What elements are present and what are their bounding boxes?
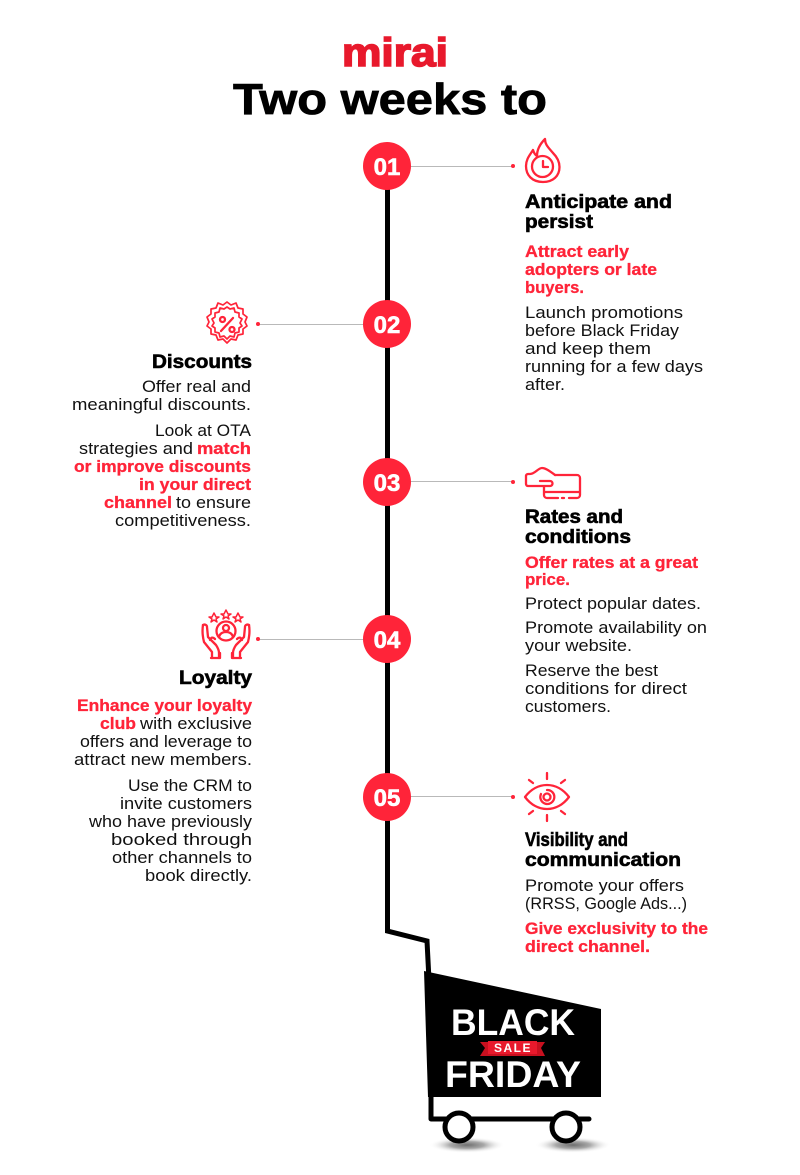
- text block: 05 Visibility and communication: Give exclusivity to the: [525, 919, 708, 938]
- step 01 marker: [363, 142, 515, 190]
- text block: 05 Visibility and communication: communication: [525, 850, 681, 871]
- text block: 04 Loyalty: Use the CRM to: [128, 776, 252, 795]
- step 03 marker: 03: [374, 470, 400, 497]
- text block: 04 Loyalty: offers and leverage to: [80, 732, 252, 751]
- text block: 01 Anticipate and persist: [525, 192, 703, 394]
- text block: 03 Rates and conditions: price.: [525, 570, 570, 589]
- text block: 03 Rates and conditions: Protect popular dates.: [525, 594, 701, 613]
- step 04 marker: [256, 615, 411, 663]
- text block: 01 Anticipate and persist: Attract early: [525, 242, 630, 261]
- step 05 marker: 05: [374, 785, 400, 812]
- text block: 03 Rates and conditions: conditions for direct: [525, 679, 687, 698]
- text block: 01 Anticipate and persist: running for a few days: [525, 357, 703, 376]
- text block: 05 Visibility and communication: Visibility and: [525, 830, 628, 851]
- text block: 03 Rates and conditions: conditions: [525, 527, 631, 548]
- text block: 02 Discounts: in your direct: [139, 475, 251, 494]
- text block: 04 Loyalty: Loyalty: [179, 668, 252, 689]
- shopping cart: Black Friday: FRIDAY: [445, 1054, 581, 1095]
- timeline spine: [388, 166, 429, 980]
- text block: 02 Discounts: meaningful discounts.: [72, 395, 251, 414]
- text block: 04 Loyalty: invite customers: [120, 794, 252, 813]
- text block: 02 Discounts: competitiveness.: [115, 511, 251, 530]
- text block: 04 Loyalty: who have previously: [88, 812, 253, 831]
- text block: 01 Anticipate and persist: Anticipate and: [525, 192, 672, 213]
- text block: 02 Discounts: strategies and: [79, 439, 193, 458]
- text block: 03 Rates and conditions: Promote availability on: [525, 618, 707, 637]
- step 01 marker: 01: [374, 154, 400, 181]
- text block: 03 Rates and conditions: Rates and: [525, 507, 623, 528]
- text block: 03 Rates and conditions: customers.: [525, 697, 611, 716]
- text block: 02 Discounts: match: [197, 439, 251, 458]
- text block: 01 Anticipate and persist: Launch promotions: [525, 303, 683, 322]
- icon: hand with credit card: [526, 468, 580, 498]
- shopping cart: Black Friday: SALE: [494, 1041, 532, 1055]
- step 04 marker: 04: [374, 627, 401, 654]
- text block: 03 Rates and conditions: [525, 507, 707, 716]
- text block: 04 Loyalty: club: [100, 714, 136, 733]
- text block: 04 Loyalty: attract new members.: [74, 750, 252, 769]
- text block: 04 Loyalty: other channels to: [112, 848, 252, 867]
- icon: flame with clock: [526, 139, 560, 182]
- step 05 marker: [363, 773, 515, 821]
- text block: 05 Visibility and communication: [525, 830, 708, 956]
- shopping cart: Black Friday: BLACK: [451, 1002, 575, 1043]
- text block: 02 Discounts: to ensure: [176, 493, 251, 512]
- text block: 04 Loyalty: Enhance your loyalty: [77, 696, 253, 715]
- logo: mirai: mirai: [342, 31, 448, 75]
- text block: 01 Anticipate and persist: after.: [525, 375, 565, 394]
- step 02 marker: 02: [374, 312, 400, 339]
- text block: 02 Discounts: [72, 352, 252, 530]
- text block: 04 Loyalty: booked through: [111, 830, 252, 849]
- text block: 03 Rates and conditions: your website.: [525, 636, 632, 655]
- text block: 01 Anticipate and persist: adopters or late: [525, 260, 657, 279]
- text block: 04 Loyalty: book directly.: [145, 866, 252, 885]
- step 02 marker: [256, 300, 411, 348]
- text block: 05 Visibility and communication: (RRSS, Google Ads...): [525, 894, 687, 913]
- shopping cart: Black Friday: [424, 971, 611, 1153]
- text block: 01 Anticipate and persist: buyers.: [525, 278, 584, 297]
- text block: 01 Anticipate and persist: before Black Friday: [525, 321, 680, 340]
- title: Two weeks to: [233, 75, 547, 124]
- text block: 02 Discounts: channel: [104, 493, 172, 512]
- text block: 02 Discounts: or improve discounts: [74, 457, 251, 476]
- text block: 04 Loyalty: [74, 668, 253, 885]
- text block: 04 Loyalty: with exclusive: [139, 714, 252, 733]
- icon: eye with rays: [525, 773, 569, 821]
- icon: discount badge: [207, 302, 247, 343]
- text block: 02 Discounts: Look at OTA: [155, 421, 252, 440]
- text block: 05 Visibility and communication: direct channel.: [525, 937, 650, 956]
- text block: 01 Anticipate and persist: persist: [525, 212, 594, 233]
- text block: 02 Discounts: Discounts: [152, 352, 252, 373]
- icon: hands holding customer and stars: [203, 610, 249, 658]
- text block: 02 Discounts: Offer real and: [142, 377, 251, 396]
- text block: 05 Visibility and communication: Promote your offers: [525, 876, 684, 895]
- text block: 03 Rates and conditions: Offer rates at a great: [525, 553, 698, 572]
- step 03 marker: [363, 458, 515, 506]
- text block: 01 Anticipate and persist: and keep them: [525, 339, 651, 358]
- text block: 03 Rates and conditions: Reserve the best: [525, 661, 658, 680]
